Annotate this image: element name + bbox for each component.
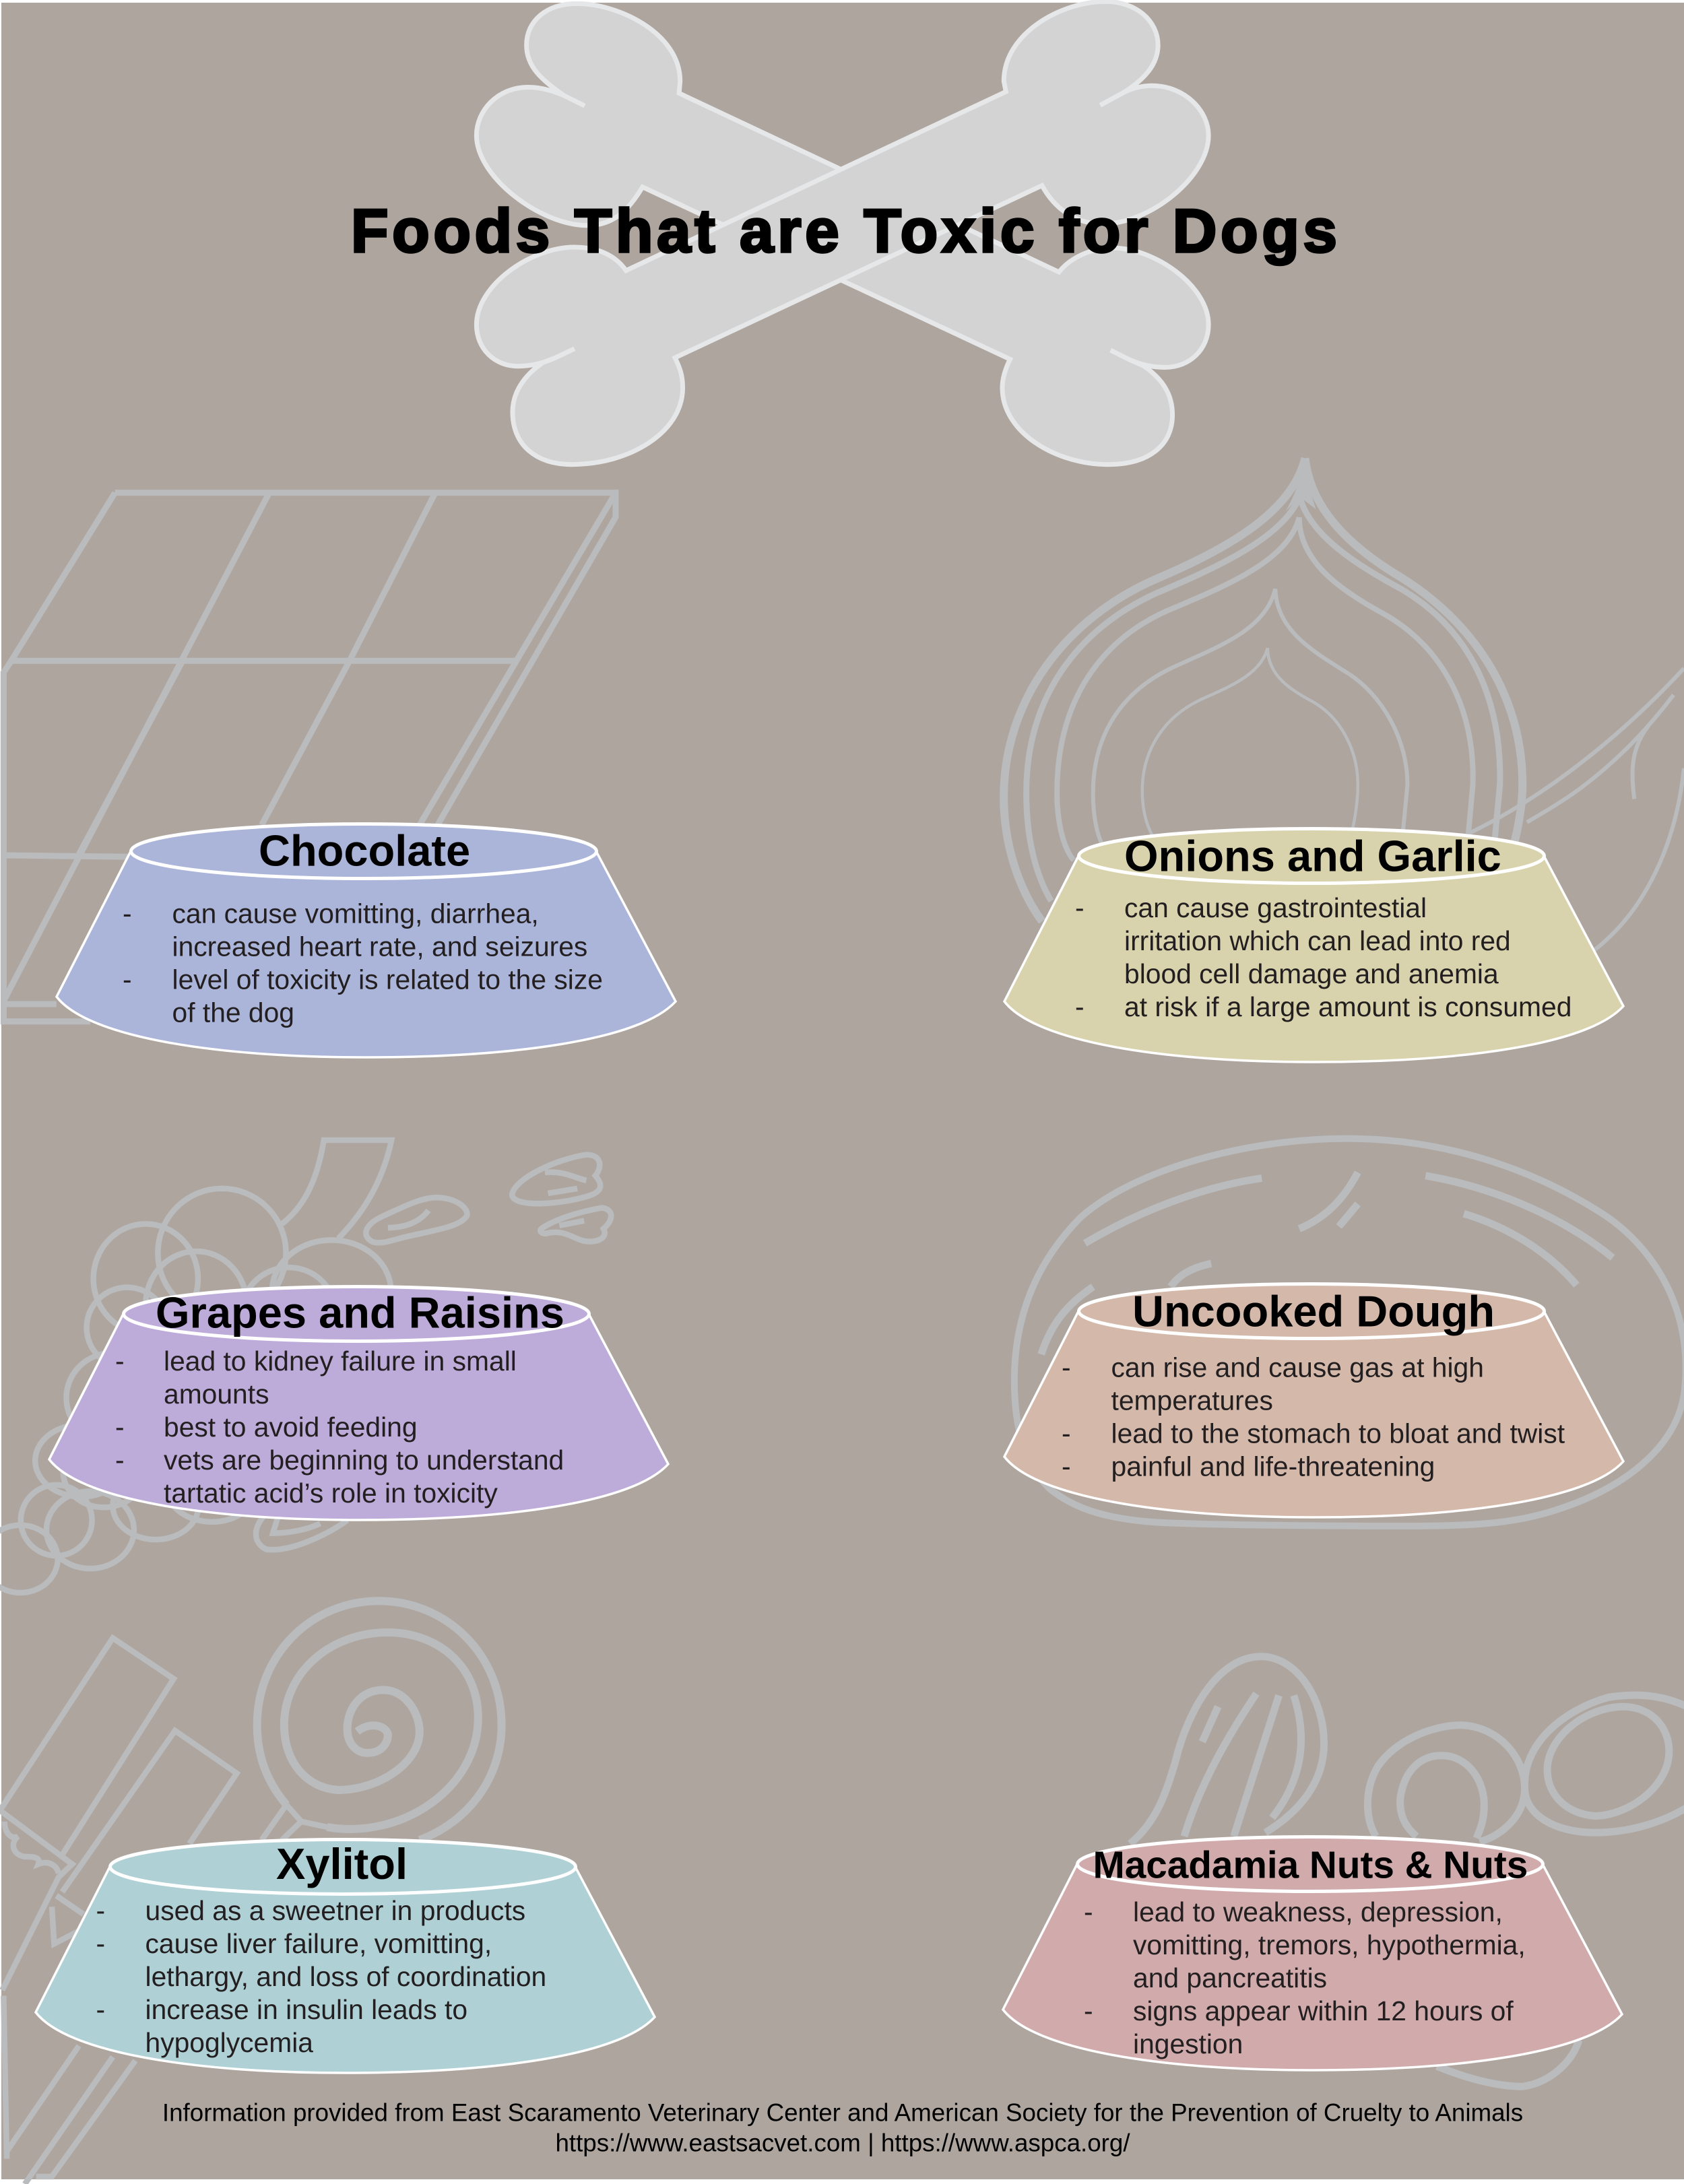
bullet text: temperatures — [1111, 1385, 1273, 1416]
heading: Xylitol — [276, 1839, 408, 1888]
leaf below bowl — [256, 1514, 348, 1550]
bowl rim — [124, 1286, 589, 1342]
title: Foods That are Toxic for Dogs — [351, 197, 1337, 265]
footer: sources: https://www.eastsacvet.com | https://www.aspca.org/ — [555, 2129, 1130, 2156]
bullet text: - — [1084, 1896, 1093, 1927]
bowl body — [1004, 856, 1623, 1062]
peanut tail — [1437, 2040, 1579, 2086]
bullet text: cause liver failure, vomitting, — [145, 1928, 492, 1959]
bullet text: can cause vomitting, diarrhea, — [172, 898, 539, 929]
bowl rim — [1079, 1284, 1544, 1339]
panel: macadamia nuts bowl — [1003, 1837, 1622, 2070]
bullet text: tartatic acid’s role in toxicity — [164, 1478, 498, 1509]
bullet text — [123, 898, 603, 1028]
bullet text — [1062, 1352, 1565, 1482]
heading: Uncooked Dough — [1132, 1286, 1495, 1336]
heading: Chocolate — [259, 826, 470, 875]
panel: grapes and raisins bowl — [49, 1286, 668, 1520]
bullet text: lethargy, and loss of coordination — [145, 1961, 546, 1992]
onion outer layer — [1004, 458, 1522, 921]
onion fourth layer — [1093, 589, 1407, 850]
icon: grapes and raisins outline — [0, 1140, 611, 1593]
bullet text: increase in insulin leads to — [145, 1994, 467, 2025]
lollipop handle — [261, 1805, 327, 1840]
grape stem — [282, 1140, 391, 1238]
bullet text: and pancreatitis — [1133, 1962, 1327, 1993]
panel: chocolate bowl — [57, 824, 676, 1057]
left nut — [1367, 1725, 1525, 1842]
bullet text: - — [1084, 1995, 1093, 2026]
bullet text: vets are beginning to understand — [164, 1445, 564, 1476]
candy bars — [0, 1638, 237, 2184]
grape leaf — [366, 1197, 467, 1243]
bowl body — [57, 851, 676, 1057]
bone: bottom-left to top-right — [476, 1, 1208, 465]
bullet text: best to avoid feeding — [164, 1412, 418, 1443]
bullet text: amounts — [164, 1379, 269, 1410]
icon: nuts outline — [1130, 1657, 1684, 2086]
bullet text: - — [115, 1412, 125, 1443]
bowl body — [36, 1867, 655, 2073]
bullet text: level of toxicity is related to the size — [172, 964, 603, 995]
bullet text: - — [1062, 1451, 1071, 1482]
bullet text: used as a sweetner in products — [145, 1895, 525, 1926]
onion core — [1142, 648, 1358, 840]
bowl body — [49, 1314, 668, 1520]
bullet text: lead to weakness, depression, — [1133, 1896, 1503, 1927]
dough score lines — [1041, 1172, 1613, 1354]
footer: sources — [162, 2098, 1523, 2156]
bullet text: - — [96, 1895, 105, 1926]
onion stem and right curve — [1468, 668, 1684, 950]
lollipop spiral — [257, 1601, 502, 1840]
bullet text: - — [96, 1928, 105, 1959]
bowl rim — [110, 1840, 575, 1894]
onion tip — [1286, 458, 1316, 511]
bullet text: - — [123, 898, 132, 929]
dough outer blob — [1014, 1139, 1684, 1526]
peanut — [1130, 1657, 1324, 1844]
bowl body — [1003, 1864, 1622, 2070]
bullet text: increased heart rate, and seizures — [172, 931, 587, 962]
heading: Onions and Garlic — [1124, 831, 1501, 881]
icon: crossed bones — [476, 1, 1208, 465]
panel: onions and garlic bowl — [1004, 828, 1623, 1062]
bullet text — [1075, 892, 1572, 1022]
icon: onion outline — [1004, 458, 1684, 950]
bullet text: of the dog — [172, 997, 294, 1028]
bullet text: - — [1062, 1352, 1071, 1383]
bullet text: blood cell damage and anemia — [1124, 958, 1499, 989]
grape cluster — [0, 1189, 391, 1593]
bullet text: signs appear within 12 hours of — [1133, 1995, 1514, 2026]
panel: uncooked dough bowl — [1004, 1284, 1623, 1517]
bullet text: painful and life-threatening — [1111, 1451, 1435, 1482]
bullet text: vomitting, tremors, hypothermia, — [1133, 1929, 1526, 1960]
bullet text: hypoglycemia — [145, 2027, 313, 2058]
bullet text: - — [123, 964, 132, 995]
bullet text — [1084, 1896, 1526, 2059]
bone: top-left to bottom-right — [476, 3, 1208, 465]
footer: sources: Information provided from East Scaramento Veterinary Center and American Society for the Prevention of Cruelty to Animals — [162, 2098, 1523, 2127]
icon: chocolate bar outline — [3, 493, 616, 1022]
bullet text: at risk if a large amount is consumed — [1124, 991, 1572, 1022]
bullet text: can cause gastrointestial — [1124, 892, 1427, 923]
bullet text: - — [115, 1346, 125, 1377]
bullet text: - — [1062, 1418, 1071, 1449]
bullet text — [96, 1895, 546, 2058]
onion third layer — [1057, 517, 1473, 860]
right nut — [1524, 1695, 1684, 1832]
icon: lollipop and candy bars outline — [0, 1601, 502, 2184]
bullet text: - — [1075, 991, 1084, 1022]
heading: Macadamia Nuts & Nuts — [1093, 1844, 1528, 1887]
panel: xylitol bowl — [36, 1839, 655, 2073]
raisin lower — [540, 1207, 611, 1242]
bullet text: lead to the stomach to bloat and twist — [1111, 1418, 1565, 1449]
heading: Grapes and Raisins — [156, 1288, 564, 1337]
icon: dough outline — [1014, 1139, 1684, 1526]
bullet text: can rise and cause gas at high — [1111, 1352, 1484, 1383]
candy wrapper scallops — [5, 1822, 59, 1874]
bullet text — [115, 1346, 564, 1509]
bullet text: - — [96, 1994, 105, 2025]
onion second layer — [1027, 497, 1500, 901]
bowl rim — [131, 824, 597, 878]
bullet text: - — [115, 1445, 125, 1476]
bullet text: irritation which can lead into red — [1124, 925, 1511, 956]
bowl rim — [1079, 828, 1544, 884]
bullet text: - — [1075, 892, 1084, 923]
bullet text: ingestion — [1133, 2028, 1243, 2059]
bowl rim — [1078, 1837, 1543, 1891]
bullet text: lead to kidney failure in small — [164, 1346, 517, 1377]
bowl body — [1004, 1311, 1623, 1517]
raisin upper — [512, 1155, 600, 1203]
